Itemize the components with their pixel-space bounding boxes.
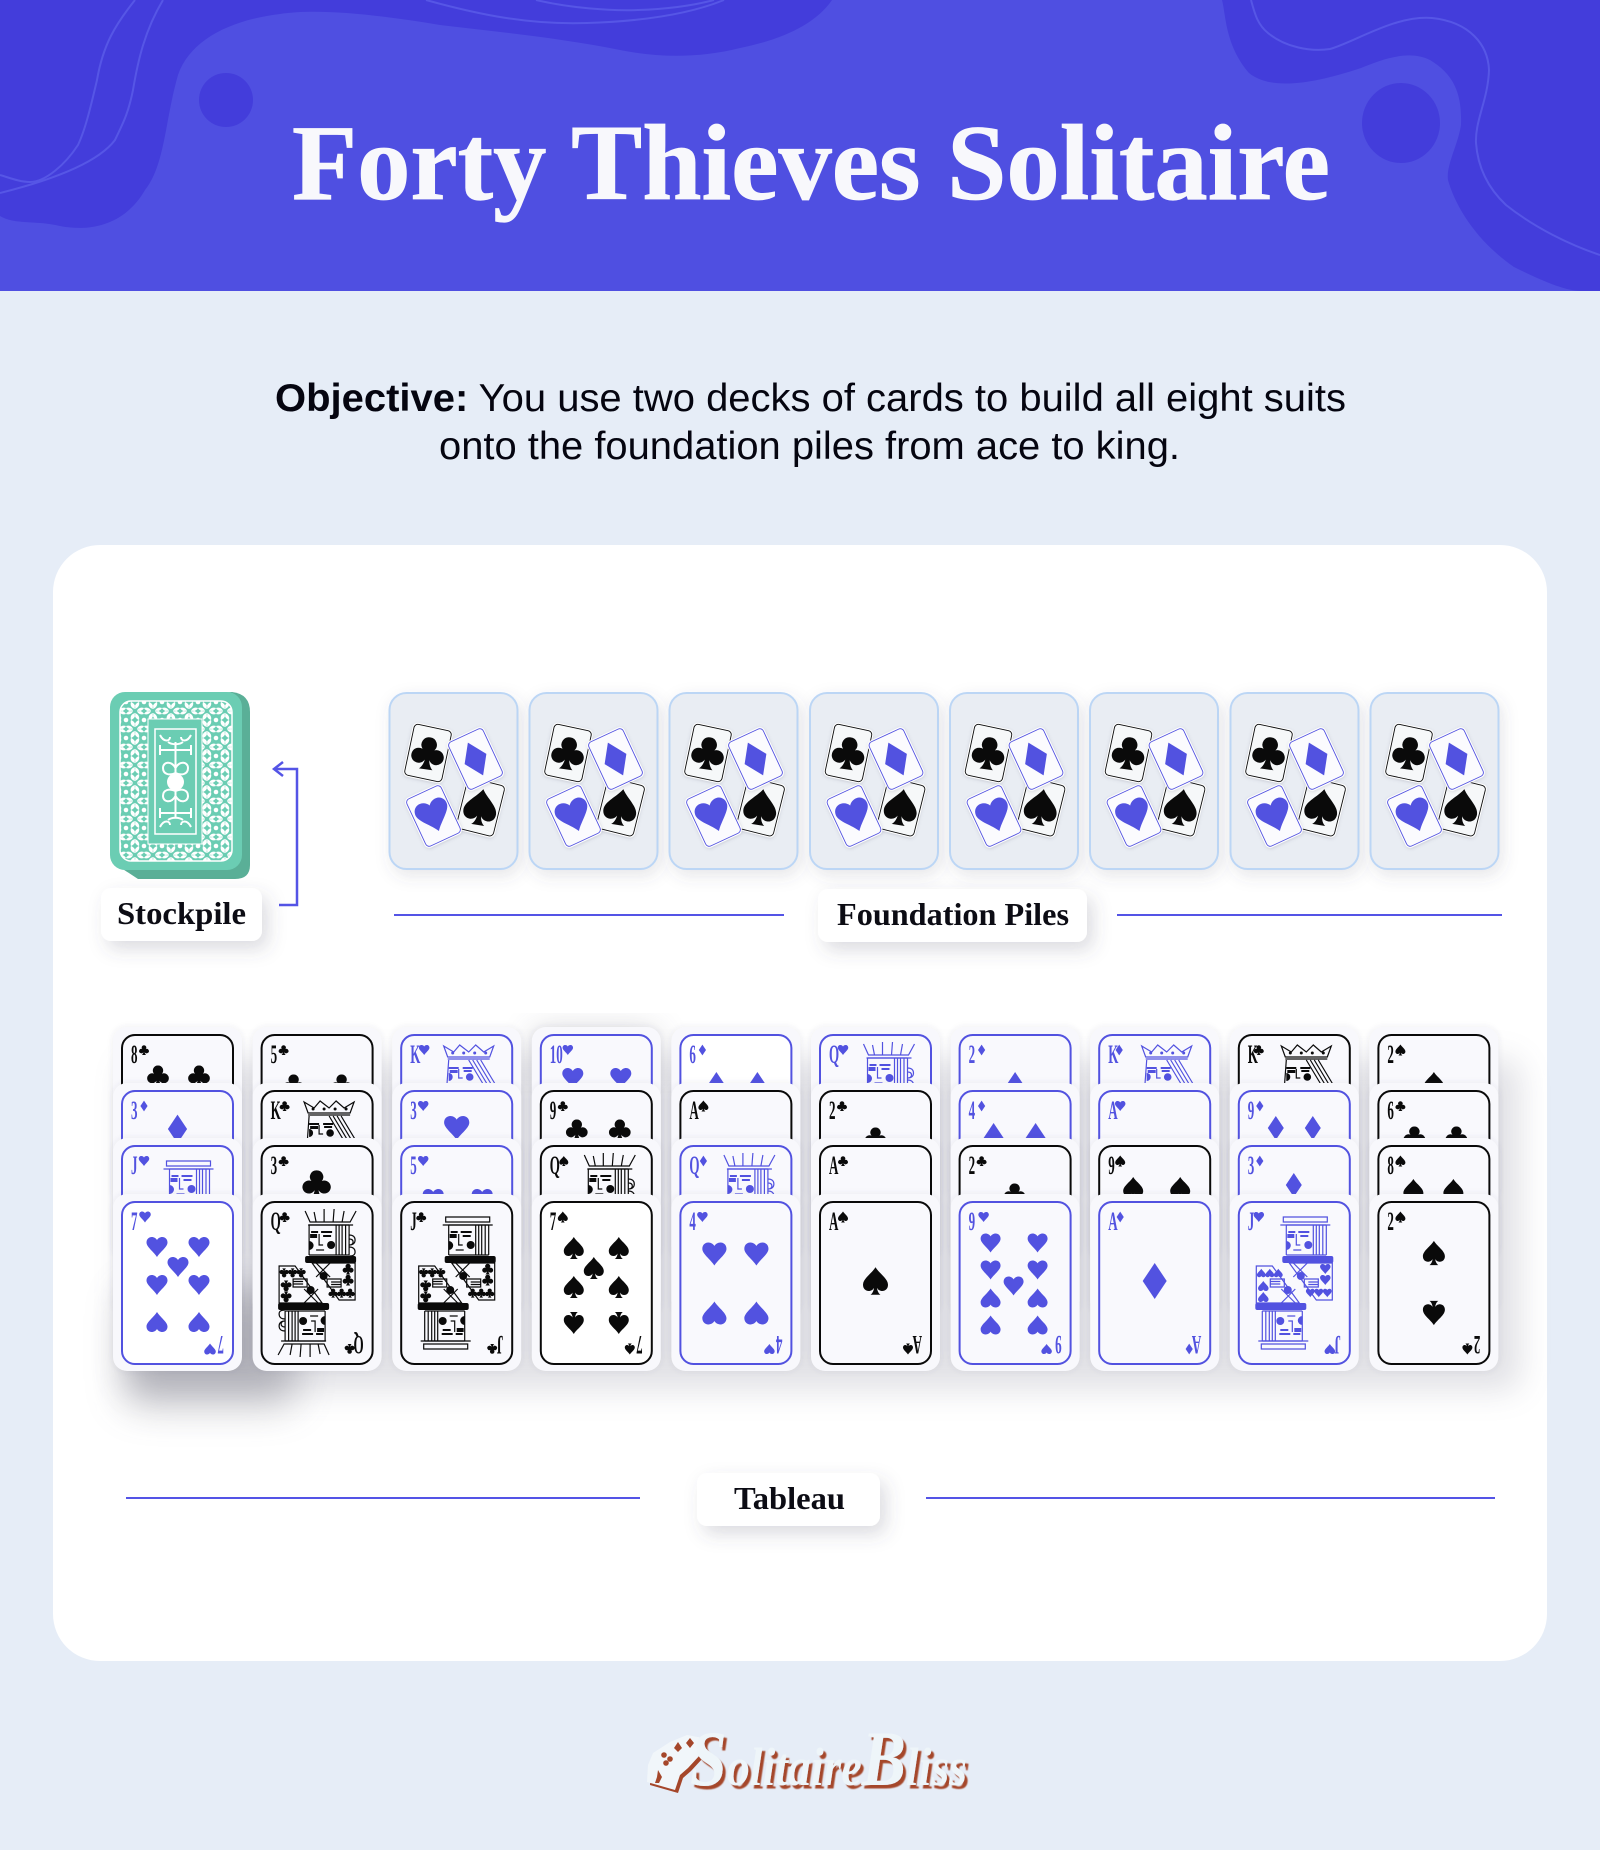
foundation pile 8	[1370, 693, 1498, 869]
card: 3 of diamonds: 3	[131, 1097, 138, 1125]
logo: Solitaire Bliss: SolitaireBliss	[690, 1715, 967, 1802]
card: jack of hearts: J	[131, 1152, 138, 1180]
title: Forty Thieves Solitaire	[292, 104, 1330, 223]
card: 7 of hearts: 7	[217, 1330, 224, 1358]
card: king of hearts	[392, 1027, 521, 1204]
foundation pile 7	[1230, 693, 1358, 869]
card: 9 of spades: 9	[1108, 1152, 1115, 1180]
card: ace of spades: A	[829, 1208, 838, 1236]
column 5	[671, 1027, 800, 1371]
card: 6 of diamonds	[671, 1027, 800, 1204]
card: 9 of diamonds: 9	[1248, 1097, 1254, 1125]
objective text	[275, 377, 1346, 468]
card: 9 of hearts	[951, 1194, 1080, 1371]
card: queen of clubs	[253, 1194, 382, 1371]
card: 4 of hearts: 4	[776, 1330, 782, 1358]
card: jack of hearts	[113, 1138, 242, 1315]
card: 5 of clubs	[253, 1027, 382, 1204]
card: 7 of hearts	[113, 1194, 242, 1371]
card: 2 of diamonds	[951, 1027, 1080, 1204]
card: queen of clubs: Q	[353, 1330, 364, 1358]
card: 2 of clubs: 2	[969, 1152, 975, 1180]
header banner	[0, 0, 1600, 291]
stockpile label	[101, 888, 262, 941]
card: 8 of clubs	[113, 1027, 242, 1204]
card: 6 of clubs: 6	[1387, 1097, 1394, 1125]
foundation piles label	[394, 889, 1502, 942]
foundation pile 4	[810, 693, 938, 869]
column 1	[113, 1027, 242, 1371]
card: king of clubs	[253, 1083, 382, 1260]
card: queen of spades: Q	[550, 1152, 560, 1180]
card: queen of hearts	[811, 1027, 940, 1204]
card: ace of spades	[671, 1083, 800, 1260]
card: king of clubs	[1230, 1027, 1359, 1204]
white panel	[53, 545, 1547, 1661]
card: 10 of hearts: 10	[550, 1041, 563, 1069]
card: ace of diamonds	[1090, 1194, 1219, 1371]
card: king of clubs: K	[271, 1097, 281, 1125]
card: 2 of spades: 2	[1387, 1041, 1394, 1069]
card: 6 of diamonds: 6	[689, 1041, 696, 1069]
card: king of clubs: K	[1248, 1041, 1258, 1069]
stockpile deck	[110, 692, 250, 879]
foundation pile 2	[530, 693, 658, 869]
column 4	[532, 1027, 661, 1371]
card: ace of clubs: A	[829, 1152, 838, 1180]
foundation piles label: Foundation Piles	[837, 896, 1069, 932]
card: 3 of diamonds	[113, 1083, 242, 1260]
card: jack of hearts	[1230, 1194, 1359, 1371]
foundation pile 5	[950, 693, 1078, 869]
objective text: onto the foundation piles from ace to king.	[439, 425, 1180, 468]
card: 2 of clubs	[951, 1138, 1080, 1315]
arrow: tableau to stockpile	[274, 762, 297, 905]
card: 10 of hearts	[532, 1027, 661, 1204]
card: jack of clubs: J	[410, 1208, 417, 1236]
card: 4 of diamonds	[951, 1083, 1080, 1260]
column 3	[392, 1027, 521, 1371]
card: 9 of hearts: 9	[969, 1208, 975, 1236]
card: 4 of hearts	[671, 1194, 800, 1371]
card: 4 of diamonds: 4	[969, 1097, 975, 1125]
card: queen of diamonds: Q	[689, 1152, 700, 1180]
card: 2 of clubs	[811, 1083, 940, 1260]
card: 7 of spades	[532, 1194, 661, 1371]
card: king of hearts: K	[410, 1041, 420, 1069]
card: 7 of spades: 7	[636, 1330, 643, 1358]
foundation pile 3	[670, 693, 798, 869]
card: 9 of clubs	[532, 1083, 661, 1260]
card: 3 of hearts	[392, 1083, 521, 1260]
card: 3 of diamonds	[1230, 1138, 1359, 1315]
card: ace of hearts: A	[1108, 1097, 1118, 1125]
card: 8 of clubs: 8	[131, 1041, 138, 1069]
card: 7 of spades: 7	[550, 1208, 556, 1236]
foundation piles	[390, 693, 1498, 869]
card: ace of diamonds: A	[1192, 1330, 1201, 1358]
tableau	[113, 1027, 1498, 1371]
card: king of diamonds	[1090, 1027, 1219, 1204]
card: 2 of spades	[1369, 1194, 1498, 1371]
column 9	[1230, 1027, 1359, 1371]
card: queen of spades	[532, 1138, 661, 1315]
card: ace of diamonds: A	[1108, 1208, 1118, 1236]
card: ace of spades: A	[913, 1330, 922, 1358]
card: queen of diamonds	[671, 1138, 800, 1315]
card: 3 of clubs	[253, 1138, 382, 1315]
foundation pile 1	[390, 693, 518, 869]
card: queen of clubs: Q	[271, 1208, 281, 1236]
card: queen of hearts: Q	[829, 1041, 839, 1069]
stockpile label: Stockpile	[117, 895, 246, 931]
card: ace of clubs	[811, 1138, 940, 1315]
foundation pile 6	[1090, 693, 1218, 869]
column 7	[951, 1027, 1080, 1371]
card: 2 of spades: 2	[1387, 1208, 1394, 1236]
card: 9 of hearts: 9	[1055, 1330, 1062, 1358]
card: jack of hearts: J	[1334, 1330, 1341, 1358]
card: 4 of hearts: 4	[689, 1208, 696, 1236]
card: ace of spades: A	[689, 1097, 699, 1125]
card: 2 of spades: 2	[1474, 1330, 1480, 1358]
card: jack of clubs	[392, 1194, 521, 1371]
tableau soft shadows	[125, 1028, 1520, 1405]
tableau label: Tableau	[734, 1480, 845, 1516]
card: 3 of clubs: 3	[271, 1152, 277, 1180]
card: 3 of hearts: 3	[410, 1097, 417, 1125]
card: 5 of hearts: 5	[410, 1152, 417, 1180]
card: 5 of clubs: 5	[271, 1041, 277, 1069]
card: 2 of diamonds: 2	[969, 1041, 975, 1069]
card: 5 of hearts	[392, 1138, 521, 1315]
column 10	[1369, 1027, 1498, 1371]
column 8	[1090, 1027, 1219, 1371]
card: 2 of spades	[1369, 1027, 1498, 1204]
card: 8 of spades	[1369, 1138, 1498, 1315]
card: ace of spades	[811, 1194, 940, 1371]
card: 3 of diamonds: 3	[1248, 1152, 1254, 1180]
card: jack of clubs: J	[497, 1330, 503, 1358]
card: 9 of diamonds	[1230, 1083, 1359, 1260]
column 6	[811, 1027, 940, 1371]
card: 6 of clubs	[1369, 1083, 1498, 1260]
card: king of diamonds: K	[1108, 1041, 1118, 1069]
card: 8 of spades: 8	[1387, 1152, 1394, 1180]
card: 7 of hearts: 7	[131, 1208, 138, 1236]
card: ace of hearts	[1090, 1083, 1219, 1260]
card: 9 of clubs: 9	[550, 1097, 556, 1125]
tableau label	[126, 1473, 1495, 1526]
column 2	[253, 1027, 382, 1371]
card: 9 of spades	[1090, 1138, 1219, 1315]
card: jack of hearts: J	[1248, 1208, 1254, 1236]
objective text: Objective: You use two decks of cards to build all eight suits	[275, 377, 1346, 420]
card: 2 of clubs: 2	[829, 1097, 836, 1125]
